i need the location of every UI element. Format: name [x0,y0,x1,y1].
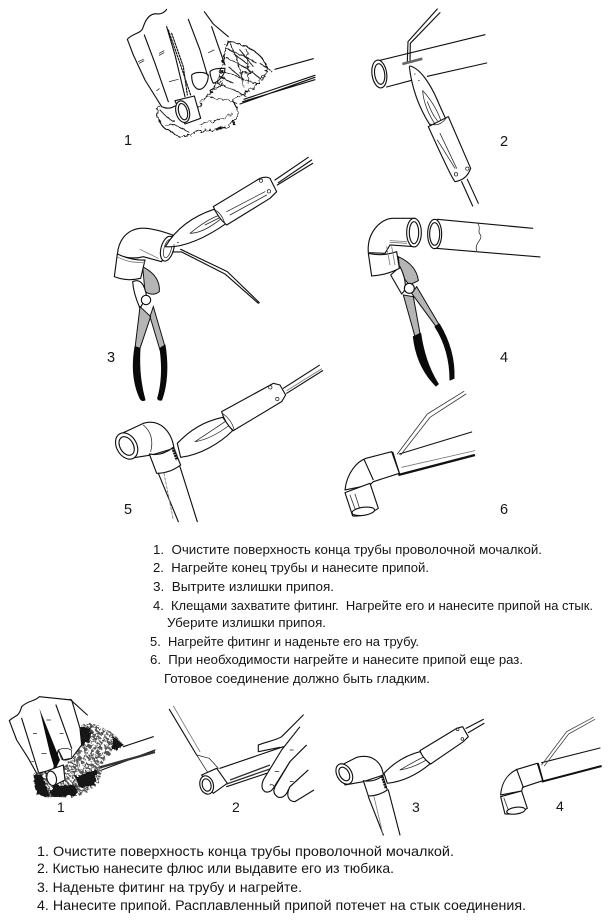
brush handle [169,709,197,755]
illustration 3: fitting in pliers heated with torch [114,157,313,401]
torch handle [213,177,277,225]
number 1: 1 [124,133,132,149]
number 3: 3 [107,350,115,366]
bottom illustration 3: fitting on pipe heated [332,719,484,835]
illustration 6: finished joint with solder [345,391,475,517]
step 4 text: 4. Клещами захватите фитинг. Нагрейте его и нанесите припой на стык. [153,598,593,613]
fitting [202,768,227,793]
number bottom 4: 4 [556,798,564,814]
pipe [102,737,155,770]
elbow fitting [501,763,543,795]
solder wire [173,249,259,303]
thumb [258,715,303,752]
solder wire [407,9,440,62]
torch handle [420,727,468,764]
solder joint [173,447,177,460]
pipe [542,748,600,763]
pipe [380,35,487,87]
shaded finger gap [168,30,191,95]
elbow fitting [117,228,173,262]
fingers [262,727,307,792]
step 1 text: 1. Очистите поверхность конца трубы проволочной мочалкой. [153,542,542,557]
step 6 continuation: Готовое соединение должно быть гладким. [164,671,430,686]
torch handle [222,383,286,431]
pipe end [45,765,65,785]
pliers [143,267,159,294]
instructions, second sequence [37,843,526,913]
pipe shaft [240,59,315,104]
number bottom 1: 1 [57,799,65,815]
illustration 1: cleaning pipe with steel wool [127,9,315,137]
pliers black grips [413,333,438,386]
number 6: 6 [500,502,508,518]
elbow fitting [338,756,383,785]
torch handle [428,117,471,182]
step 4 continuation: Уберите излишки припоя. [167,615,326,630]
flame [177,417,233,457]
pliers black grips [133,347,145,401]
number bottom 3: 3 [412,799,420,815]
steel wool [157,42,270,137]
number bottom 2: 2 [232,799,240,815]
illustration 5: heating fitting on pipe [111,365,323,522]
solder band [402,59,422,64]
dark finger gap [39,708,60,770]
pipe [158,467,197,522]
fingers [9,697,82,773]
pipe end [175,96,201,124]
illustration 4: pliers holding fitting and pipe [368,218,540,386]
knuckle ticks [138,50,214,91]
hose [283,365,323,393]
step 5 text: 5. Нагрейте фитинг и наденьте его на трубу. [150,634,419,649]
pliers pivot [404,283,414,293]
illustration 2: heating pipe end with torch [370,9,487,206]
step 6 text: 6. При необходимости нагрейте и нанесите припой еще раз. [150,652,523,667]
bottom step 1 text: 1. Очистите поверхность конца трубы проволочной мочалкой. [37,843,454,859]
pipe [436,219,540,257]
number 2: 2 [500,134,508,150]
pipe [368,790,400,835]
bottom illustration 4: applying solder [501,717,602,815]
elbow fitting [368,218,415,253]
bottom illustration 2: applying flux with brush [169,706,314,802]
flame [384,752,430,783]
pliers [398,257,418,285]
hose [466,719,484,733]
fingers [127,9,228,108]
pipe break mark [476,223,481,251]
bottom step 3 text: 3. Наденьте фитинг на трубу и нагрейте. [37,879,302,895]
flame [409,66,445,125]
step 2 text: 2. Нагрейте конец трубы и нанесите припой. [153,560,429,575]
pipe [399,432,472,454]
elbow fitting [345,452,399,490]
solder wire [542,717,595,766]
steel wool mass [33,724,124,797]
solder wire [397,391,466,455]
pliers pivot [141,295,151,305]
bottom step 2 text: 2. Кистью нанесите флюс или выдавите его из тюбика. [37,860,394,876]
number 4: 4 [500,350,508,366]
elbow fitting [118,422,174,458]
hose [462,179,478,206]
instructions, first sequence [150,542,593,686]
hose [275,157,313,185]
flame [165,209,227,247]
number 5: 5 [124,502,132,518]
bottom step 4 text: 4. Нанесите припой. Расплавленный припой потечет на стык соединения. [37,897,526,913]
solder joint [382,776,386,788]
pipe [220,747,283,787]
step 3 text: 3. Вытрите излишки припоя. [153,579,334,594]
bottom illustration 1: cleaning with steel wool [9,697,155,797]
brush head [197,755,218,773]
